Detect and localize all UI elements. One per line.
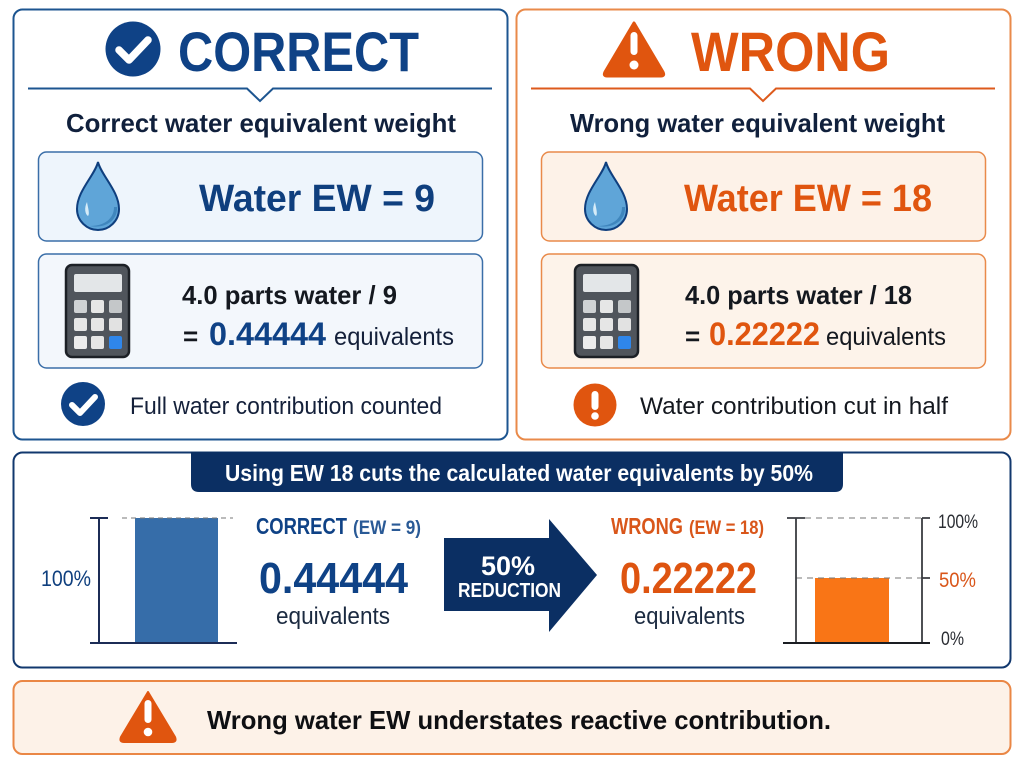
value: 0.44444: 0.44444 — [259, 554, 408, 603]
header divider with notch — [531, 88, 995, 101]
bar chart: correct 100% — [41, 518, 237, 643]
takeaway text: Wrong water EW understates reactive contribution. — [207, 705, 831, 735]
value: 0.22222: 0.22222 — [620, 554, 757, 603]
unit: equivalents: equivalents — [276, 603, 390, 630]
calculation line 1: 4.0 parts water / 9 — [182, 280, 397, 310]
arrow: 50% reduction: REDUCTION — [458, 580, 561, 602]
value: water EW 9: Water EW = 9 — [199, 178, 435, 220]
subheading: Wrong water equivalent weight — [570, 108, 945, 138]
label: correct EW 9: (EW = 9) — [353, 518, 421, 539]
label: wrong EW 18 — [611, 513, 764, 539]
heading: correct: CORRECT — [178, 20, 419, 83]
bar chart: wrong 50%: 100% — [938, 512, 978, 533]
calculation line 2: equivalents — [334, 323, 454, 351]
note: contribution cut: Water contribution cut in half — [640, 393, 948, 420]
box: calculation — [38, 254, 482, 368]
icon: check circle — [61, 382, 105, 426]
panel: correct — [14, 10, 508, 440]
banner: Using EW 18 cuts the calculated water equivalents by 50% — [225, 460, 813, 486]
header divider with notch — [28, 88, 492, 101]
banner — [191, 452, 843, 492]
calculation line 2: 0.22222 — [709, 316, 820, 352]
box: water EW — [542, 152, 986, 241]
bar chart: wrong 50% — [783, 512, 978, 650]
label: wrong EW 18: WRONG — [611, 513, 683, 539]
icon: warning triangle — [604, 23, 664, 76]
icon: exclamation circle — [574, 384, 616, 426]
box: water EW — [38, 152, 482, 241]
calculation line 2: = — [685, 321, 700, 351]
bar chart: correct 100%: 100% — [41, 566, 91, 591]
icon: warning triangle — [120, 692, 176, 742]
arrow: 50% reduction: 50% — [481, 551, 535, 581]
value: water EW 18: Water EW = 18 — [684, 178, 932, 220]
box: calculation — [542, 254, 986, 368]
label: correct EW 9 — [256, 513, 421, 539]
subheading: Correct water equivalent weight — [66, 108, 456, 138]
calculation line 2: 0.44444 — [209, 316, 326, 352]
calculation line 1: 4.0 parts water / 18 — [685, 280, 912, 310]
icon: check badge — [106, 22, 160, 76]
label: correct EW 9: CORRECT — [256, 513, 347, 539]
label: wrong EW 18: (EW = 18) — [689, 518, 764, 539]
icon: water drop — [77, 162, 119, 230]
panel: comparison — [14, 452, 1010, 668]
callout: takeaway — [14, 681, 1010, 754]
calculation line 2 — [685, 316, 946, 352]
panel: wrong — [516, 10, 1010, 440]
unit: equivalents: equivalents — [634, 603, 745, 630]
icon: calculator — [66, 265, 129, 357]
bar chart: wrong 50%: 0% — [941, 629, 964, 650]
icon: calculator — [575, 265, 638, 357]
calculation line 2 — [183, 316, 454, 352]
calculation line 2: equivalents — [826, 323, 946, 351]
calculation line 2: = — [183, 321, 198, 351]
heading: wrong: WRONG — [691, 20, 890, 83]
arrow: 50% reduction — [444, 519, 597, 632]
icon: water drop — [585, 162, 627, 230]
note: full contribution: Full water contribution counted — [130, 393, 442, 420]
bar chart: wrong 50%: 50% — [939, 569, 976, 592]
